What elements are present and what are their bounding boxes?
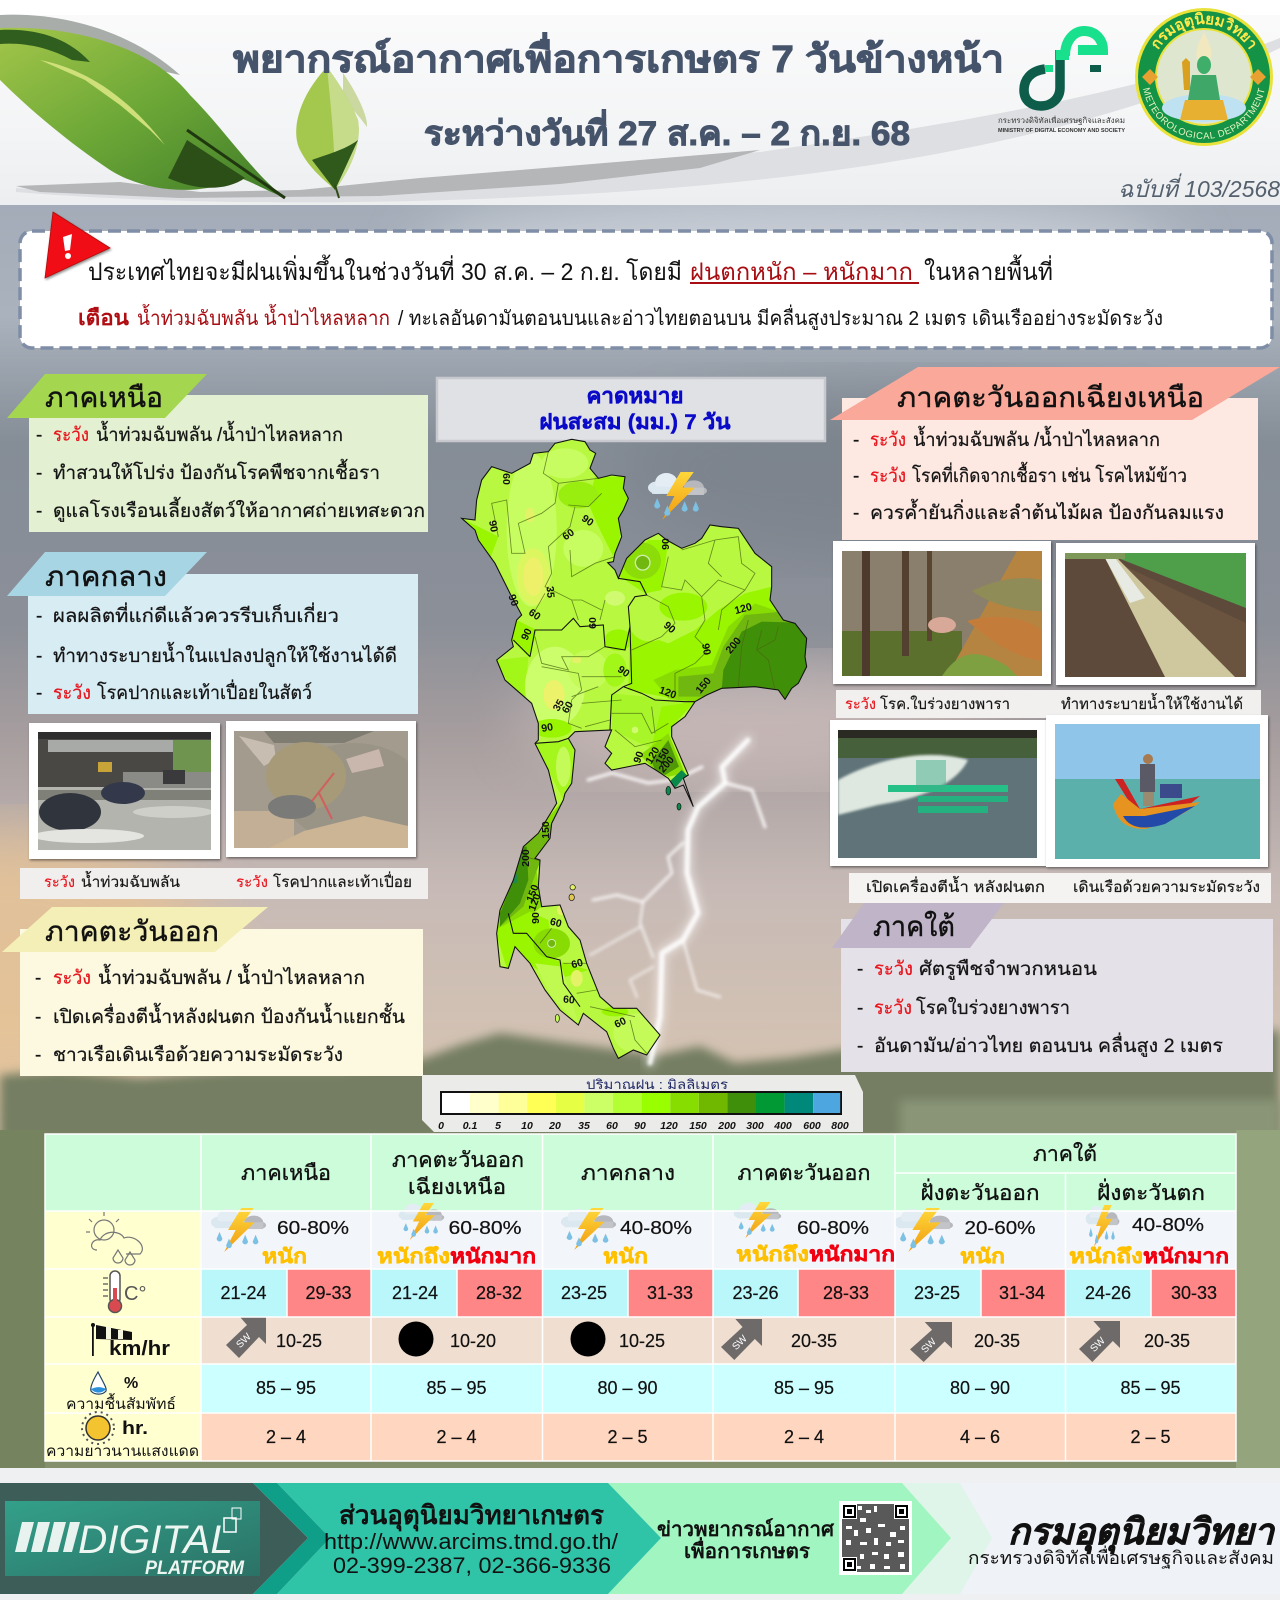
alert panel: ประเทศไทยจะมีฝนเพิ่มขึ้นในช่วงวันที่ 30 ส.ค. – 2 ก.ย. โดยมี xyxy=(88,254,682,286)
alert panel: ในหลายพื้นที่ xyxy=(924,254,1053,286)
table header row: ฝั่งตะวันออก xyxy=(920,1178,1040,1205)
rain row: หนักถึง xyxy=(377,1246,450,1268)
legend: rainfall scale: 300 xyxy=(746,1120,764,1132)
contact text: 02-399-2387, 02-366-9336 xyxy=(333,1553,611,1578)
header leaves xyxy=(0,15,367,198)
wind row: 20-35 xyxy=(1144,1331,1190,1351)
legend: rainfall scale: 120 xyxy=(660,1120,678,1132)
captions: northeast photos lower xyxy=(849,873,1271,903)
icon: sun with label xyxy=(46,1412,199,1460)
panel: northeast region: - xyxy=(853,466,859,487)
sunshine row: 2 – 5 xyxy=(1130,1427,1171,1447)
rain row: 60-80% xyxy=(448,1218,522,1238)
panel: east region: เปิดเครื่องตีน้ำหลังฝนตก ป้องกันน้ำแยกชั้น xyxy=(53,1003,405,1028)
rainfall contour labels: 150 xyxy=(524,883,542,904)
sunshine row: 2 – 5 xyxy=(607,1427,648,1447)
sunshine row: 2 – 4 xyxy=(266,1427,306,1447)
rainfall contour labels: 60 xyxy=(526,607,543,623)
QR caption: เพื่อการเกษตร xyxy=(684,1536,810,1563)
rain row: หนักมาก xyxy=(1143,1246,1229,1268)
rain row: หนักถึง xyxy=(736,1244,809,1266)
icon: humidity drop with label xyxy=(66,1372,176,1413)
rainfall contour labels xyxy=(486,473,753,1031)
east heading tag: ภาคตะวันออก xyxy=(45,916,219,947)
rain row: หนัก xyxy=(603,1246,648,1268)
rain row: 20-60% xyxy=(964,1218,1036,1238)
panel: northeast region: ควรค้ำยันกิ่งและลำต้นไม้ผล ป้องกันลมแรง xyxy=(870,499,1224,524)
icon: storm cloud over map xyxy=(648,472,707,520)
rainfall contour labels: 60 xyxy=(549,916,563,930)
northeast zones xyxy=(628,587,783,702)
legend: rainfall scale: 0.1 xyxy=(463,1120,477,1132)
rain row: หนักถึง xyxy=(1069,1246,1143,1268)
edition number: ฉบับที่ 103/2568 xyxy=(1118,173,1280,202)
legend: rainfall scale: 10 xyxy=(521,1120,533,1132)
panel: northeast region: - xyxy=(853,503,859,524)
panel: central region: ผลผลิตที่แก่ดีแล้วควรรีบเก็บเกี่ยว xyxy=(53,602,339,627)
rainfall contour labels: 120 xyxy=(526,892,544,913)
digital platform badge: DIGITAL xyxy=(78,1518,233,1562)
photo: rubber leaf disease xyxy=(833,541,1051,684)
wind row: SW xyxy=(1088,1335,1108,1355)
icon: red warning triangle xyxy=(45,212,110,278)
rainfall contour labels: 90 xyxy=(615,664,632,680)
captions: central photos: น้ำท่วมฉับพลัน xyxy=(81,871,180,891)
logo: meteorological department seal: METEOROLOGICAL DEPARTMENT xyxy=(1143,88,1264,140)
QR caption xyxy=(657,1518,835,1563)
rainfall contour labels: 150 xyxy=(540,821,552,839)
panel: south region: ระวัง xyxy=(874,959,913,980)
outline and region borders xyxy=(462,439,807,1058)
panel: south region: - xyxy=(857,959,863,980)
rainfall contour labels: 60 xyxy=(613,1015,628,1031)
humidity row: 85 – 95 xyxy=(426,1378,487,1398)
alert panel: เตือน xyxy=(78,306,130,330)
alert panel: / ทะเลอันดามันตอนบนและอ่าวไทยตอนบน มีคลื่นสูงประมาณ 2 เมตร เดินเรืออย่างระมัดระวัง xyxy=(398,304,1163,331)
panel: south region: ระวัง xyxy=(874,998,912,1019)
rainfall contour labels: 60 xyxy=(500,473,512,485)
captions: central photos: ระวัง xyxy=(44,874,75,891)
central heading tag xyxy=(7,552,207,596)
rainfall contour labels: 150 xyxy=(694,675,714,696)
table header row: ภาคตะวันออก xyxy=(738,1162,870,1185)
rainfall contour labels: 60 xyxy=(560,699,576,716)
east zones xyxy=(612,693,695,750)
panel: north region: ระวัง xyxy=(53,425,89,446)
rainfall contour labels: 90 xyxy=(631,750,647,765)
footer chevrons xyxy=(0,1483,992,1594)
captions: northeast photos upper xyxy=(836,690,1261,718)
logo: meteorological department seal: กรมอุตุนิยมวิทยา xyxy=(1152,12,1256,50)
department name xyxy=(968,1511,1276,1569)
rainfall contour labels: 200 xyxy=(520,849,532,867)
temperature row: 23-26 xyxy=(732,1283,779,1303)
central heading tag: ภาคกลาง xyxy=(45,561,167,592)
captions: northeast photos upper: โรค.ใบร่วงยางพารา xyxy=(880,695,1010,713)
south zones xyxy=(498,802,562,928)
captions: northeast photos lower: เดินเรือด้วยความระมัดระวัง xyxy=(1073,879,1260,896)
legend: rainfall scale: 150 xyxy=(689,1120,707,1132)
rainfall contour labels: 200 xyxy=(724,635,744,656)
panel: northeast region: ระวัง xyxy=(870,466,906,487)
table header row: ภาคใต้ xyxy=(1033,1142,1097,1166)
rain row: 60-80% xyxy=(277,1218,349,1238)
panel: south region: ศัตรูพืชจำพวกหนอน xyxy=(919,959,1097,980)
legend: rainfall scale: 0 xyxy=(438,1120,444,1132)
contact text: http://www.arcims.tmd.go.th/ xyxy=(324,1529,619,1554)
temperature row: 28-32 xyxy=(476,1283,522,1303)
photo: fishing boat xyxy=(1046,715,1268,867)
rainfall contour labels: 90 xyxy=(505,593,521,608)
panel: east region xyxy=(2,907,423,1076)
east heading tag xyxy=(2,907,268,952)
icon: humidity drop with label: % xyxy=(124,1375,138,1392)
wind row: 20-35 xyxy=(974,1331,1020,1351)
wind row: 10-20 xyxy=(450,1331,496,1351)
photo: flooded road xyxy=(29,723,220,859)
map heading xyxy=(437,378,825,441)
QR code xyxy=(839,1501,912,1575)
panel: north region: - xyxy=(36,425,42,446)
temperature row: 21-24 xyxy=(392,1283,438,1303)
rainfall contour labels: 120 xyxy=(733,601,753,617)
temperature row: 28-33 xyxy=(823,1283,869,1303)
panel: central region: - xyxy=(36,606,42,627)
panel: northeast region xyxy=(830,367,1280,540)
alert panel: ฝนตกหนัก – หนักมาก xyxy=(690,259,913,286)
panel: east region: - xyxy=(35,1045,41,1066)
captions: northeast photos lower: เปิดเครื่องตีน้ำ หลังฝนตก xyxy=(866,876,1045,896)
panel: central region: ระวัง xyxy=(53,683,91,704)
sunshine row: 2 – 4 xyxy=(784,1427,824,1447)
panel: south region: โรคใบร่วงยางพารา xyxy=(916,996,1070,1019)
central zones xyxy=(497,656,528,698)
header band xyxy=(0,0,1280,205)
rain row: หนัก xyxy=(960,1246,1005,1268)
wind row: SW xyxy=(234,1331,254,1351)
panel: east region: ชาวเรือเดินเรือด้วยความระมัดระวัง xyxy=(53,1045,343,1066)
logo: digital economy ministry xyxy=(998,31,1125,134)
rainfall contour labels: 120 xyxy=(657,684,678,702)
temperature row: 31-33 xyxy=(647,1283,693,1303)
humidity row: 85 – 95 xyxy=(774,1378,834,1398)
legend: rainfall scale: 20 xyxy=(548,1120,561,1132)
photo: buffalo xyxy=(226,721,424,857)
legend: rainfall scale: 90 xyxy=(634,1120,646,1132)
rainfall contour labels: 60 xyxy=(587,617,599,629)
north heading tag xyxy=(7,374,207,418)
digital platform badge xyxy=(5,1501,260,1579)
humidity row xyxy=(201,1364,1236,1413)
footer xyxy=(0,1468,1280,1600)
rainfall contour labels: 60 xyxy=(570,957,585,971)
panel: east region: - xyxy=(35,1007,41,1028)
icon: wind sock with unit: km/hr xyxy=(109,1338,170,1360)
department name: กระทรวงดิจิทัลเพื่อเศรษฐกิจและสังคม xyxy=(968,1545,1274,1569)
subtitle: ระหว่างวันที่ 27 ส.ค. – 2 ก.ย. 68 xyxy=(424,109,910,153)
panel: east region: น้ำท่วมฉับพลัน / น้ำป่าไหลหลาก xyxy=(98,964,365,989)
panel: central region: โรคปากและเท้าเปื่อยในสัตว์ xyxy=(97,679,312,704)
icon: sun with label: hr. xyxy=(122,1418,148,1438)
rainfall contour labels: 60 xyxy=(563,994,575,1006)
map of Thailand rainfall xyxy=(455,430,822,1063)
rain row: หนัก xyxy=(262,1246,307,1268)
digital platform badge: PLATFORM xyxy=(145,1558,245,1579)
panel: north region: - xyxy=(36,463,42,484)
panel: north region xyxy=(7,374,428,532)
captions: central photos: ระวัง xyxy=(236,874,268,891)
panel: south region: - xyxy=(857,998,863,1019)
legend: rainfall scale xyxy=(422,1075,863,1132)
humidity row: 85 – 95 xyxy=(1120,1378,1181,1398)
legend: rainfall scale: 400 xyxy=(773,1120,792,1132)
panel: north region: - xyxy=(36,501,42,522)
panel: central region: ทำทางระบายน้ำในแปลงปลูกให้ใช้งานได้ดี xyxy=(53,642,397,667)
table header row: ฝั่งตะวันตก xyxy=(1097,1178,1205,1205)
panel: northeast region: โรคที่เกิดจากเชื้อรา เช่น โรคไหม้ข้าว xyxy=(912,462,1187,487)
wind row: SW xyxy=(730,1333,750,1353)
header grey swoosh xyxy=(16,38,1280,202)
temperature row: 23-25 xyxy=(561,1283,607,1303)
north zones xyxy=(464,520,498,556)
legend: rainfall scale: 35 xyxy=(578,1120,590,1132)
northeast heading tag: ภาคตะวันออกเฉียงเหนือ xyxy=(897,382,1204,413)
panel: northeast region: ระวัง xyxy=(870,430,906,451)
department name: กรมอุตุนิยมวิทยา xyxy=(1008,1511,1276,1554)
icon: thermometer: C° xyxy=(124,1283,146,1305)
temperature row: 24-26 xyxy=(1085,1283,1131,1303)
panel: east region: ระวัง xyxy=(53,968,91,989)
rainfall contour labels: 150 xyxy=(653,746,673,767)
legend: rainfall scale: 5 xyxy=(495,1120,501,1132)
rainfall contour labels: 90 xyxy=(699,642,713,656)
north heading tag: ภาคเหนือ xyxy=(45,382,163,413)
wind row: SW xyxy=(919,1336,939,1356)
panel: central region xyxy=(7,552,418,714)
rainfall contour labels: 35 xyxy=(544,586,557,599)
temperature row: 21-24 xyxy=(220,1283,267,1303)
rain row: 40-80% xyxy=(620,1218,692,1238)
rain row: หนักมาก xyxy=(450,1246,536,1268)
table header row: ภาคตะวันออก xyxy=(392,1149,524,1172)
legend: rainfall scale: 60 xyxy=(606,1120,618,1132)
alert panel: น้ำท่วมฉับพลัน น้ำป่าไหลหลาก xyxy=(137,304,390,330)
icon: thermometer xyxy=(103,1271,146,1312)
temperature row: 29-33 xyxy=(305,1283,352,1303)
panel: central region: - xyxy=(36,683,42,704)
logo: digital economy ministry: MINISTRY OF DIGITAL ECONOMY AND SOCIETY xyxy=(998,128,1125,134)
contact text xyxy=(324,1500,619,1578)
temperature row xyxy=(201,1269,1236,1317)
sunshine row: 4 – 6 xyxy=(960,1427,1000,1447)
legend: rainfall scale: 800 xyxy=(831,1120,849,1132)
table grid lines xyxy=(45,1134,1236,1461)
rainfall contour labels: 200 xyxy=(657,754,677,775)
rainfall contour labels: 90 xyxy=(661,619,678,636)
captions: central photos xyxy=(20,868,428,899)
rainfall contour labels: 120 xyxy=(643,745,663,766)
temperature row: 31-34 xyxy=(999,1283,1045,1303)
rain row xyxy=(201,1202,1236,1269)
province borders xyxy=(492,452,778,1053)
sunshine row: 2 – 4 xyxy=(436,1427,477,1447)
rainfall contour labels: 90 xyxy=(660,538,672,550)
map heading: ฝนสะสม (มม.) 7 วัน xyxy=(540,411,731,434)
rainfall contour labels: 60 xyxy=(560,526,577,543)
icon: wind sock with unit xyxy=(91,1323,170,1360)
map heading: คาดหมาย xyxy=(586,385,684,408)
temperature row: 23-25 xyxy=(914,1283,960,1303)
rainfall contour labels: 90 xyxy=(530,912,542,924)
panel: northeast region: - xyxy=(853,430,859,451)
title: พยากรณ์อากาศเพื่อการเกษตร 7 วันข้างหน้า xyxy=(233,32,1004,81)
northeast heading tag xyxy=(830,367,1280,420)
south heading tag xyxy=(832,903,1004,948)
temperature row: 30-33 xyxy=(1171,1283,1217,1303)
panel: east region: - xyxy=(35,968,41,989)
captions: northeast photos upper: ระวัง xyxy=(845,696,876,713)
humidity row: 80 – 90 xyxy=(950,1378,1010,1398)
panel: north region: ดูแลโรงเรือนเลี้ยงสัตว์ให้อากาศถ่ายเทสะดวก xyxy=(53,497,425,522)
rainfall contour labels: 90 xyxy=(579,513,596,529)
panel: south region: อันดามัน/อ่าวไทย ตอนบน คลื่นสูง 2 เมตร xyxy=(874,1032,1223,1057)
panel: north region: ทำสวนให้โปร่ง ป้องกันโรคพืชจากเชื้อรา xyxy=(53,459,380,484)
icon: sun with label: ความยาวนานแสงแดด xyxy=(46,1443,199,1460)
table header row xyxy=(45,1134,1236,1211)
alert panel xyxy=(20,212,1272,348)
panel: south region: - xyxy=(857,1036,863,1057)
table header row: เฉียงเหนือ xyxy=(408,1176,506,1199)
captions: northeast photos upper: ทำทางระบายน้ำให้ใช้งานได้ xyxy=(1061,693,1243,713)
forecast table xyxy=(45,1134,1236,1461)
rain row: หนักมาก xyxy=(809,1244,895,1266)
wind row xyxy=(201,1317,1236,1364)
captions: central photos: โรคปากและเท้าเปื่อย xyxy=(273,871,412,891)
QR caption: ข่าวพยากรณ์อากาศ xyxy=(657,1518,835,1541)
humidity row: 85 – 95 xyxy=(256,1378,316,1398)
legend: rainfall scale: 600 xyxy=(803,1120,821,1132)
islands xyxy=(666,786,671,795)
contact text: ส่วนอุตุนิยมวิทยาเกษตร xyxy=(339,1500,604,1532)
left label column xyxy=(45,1211,201,1461)
rain row: 40-80% xyxy=(1132,1215,1204,1235)
wind row: 20-35 xyxy=(791,1331,837,1351)
rain row: 60-80% xyxy=(797,1218,869,1238)
humidity row: 80 – 90 xyxy=(597,1378,658,1398)
south heading tag: ภาคใต้ xyxy=(873,910,955,942)
photo: paddle aerator xyxy=(830,720,1046,866)
rainfall contour labels: 35 xyxy=(551,697,567,714)
legend: rainfall scale: 200 xyxy=(717,1120,736,1132)
panel: central region: - xyxy=(36,646,42,667)
wind row: 10-25 xyxy=(619,1331,665,1351)
rainfall contour labels: 90 xyxy=(519,626,535,642)
rainfall contour labels: 90 xyxy=(540,721,554,735)
panel: south region xyxy=(832,903,1273,1072)
lightning bolt xyxy=(588,740,765,1063)
rainfall contour labels: 90 xyxy=(486,519,500,533)
logo: meteorological department seal xyxy=(1135,8,1273,146)
logo: digital economy ministry: กระทรวงดิจิทัลเพื่อเศรษฐกิจและสังคม xyxy=(998,115,1125,125)
wind row: 10-25 xyxy=(276,1331,322,1351)
sunshine row xyxy=(201,1413,1236,1461)
table header row: ภาคกลาง xyxy=(581,1162,675,1185)
icon: humidity drop with label: ความชื้นสัมพัทธ์ xyxy=(66,1393,176,1413)
legend: rainfall scale: ปริมาณฝน : มิลลิเมตร xyxy=(586,1077,728,1092)
panel: northeast region: น้ำท่วมฉับพลัน /น้ำป่าไหลหลาก xyxy=(913,426,1160,451)
panel: north region: น้ำท่วมฉับพลัน /น้ำป่าไหลหลาก xyxy=(96,421,343,446)
table header row: ภาคเหนือ xyxy=(241,1162,331,1185)
icon: partly cloudy xyxy=(86,1212,142,1265)
photo: drainage channel xyxy=(1056,543,1255,685)
